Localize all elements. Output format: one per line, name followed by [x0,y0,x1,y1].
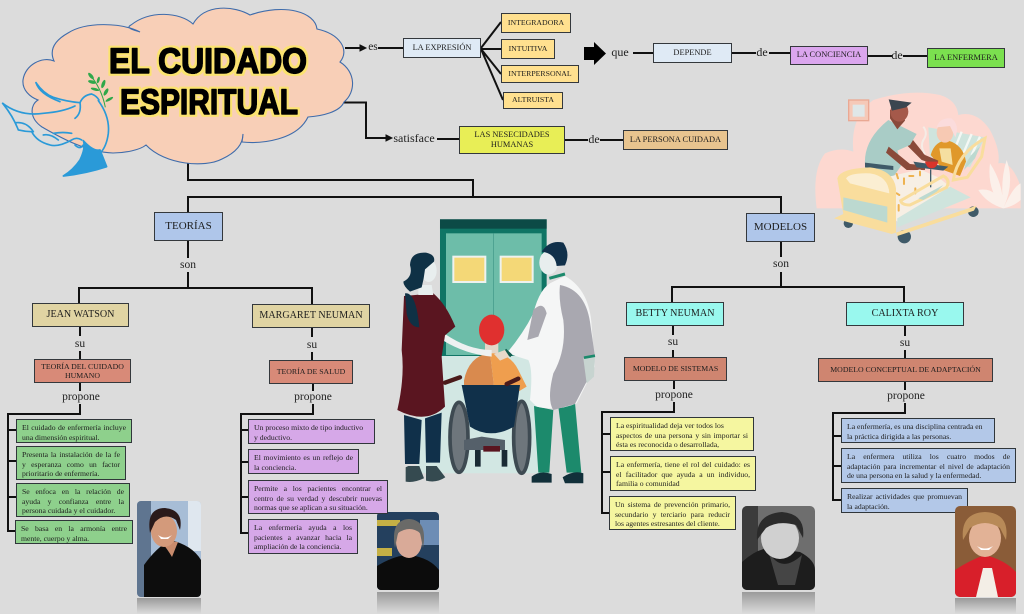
text: roy 1 [841,418,995,443]
text: betty 3: los agentes estresantes del cliente. [615,519,720,528]
text: watson 3 [16,483,130,517]
box: teorias: TEORÍAS [165,220,212,232]
word: es: es [368,41,378,53]
panel: Calixta Roy text [841,418,1016,513]
text: margaret 2 [248,449,359,474]
cloud [23,8,353,164]
word: su: su [75,338,85,350]
word: de: de [588,132,600,146]
title text: EL CUIDADO [109,42,307,81]
word: satisface: satisface [393,131,435,145]
text: betty 3: secundario y terciario para reducir [615,510,730,519]
word: de: de [891,48,903,62]
photo: Margaret Neuman [377,512,439,611]
text: margaret 2: la conciencia. [254,463,296,472]
text: roy 1: La enfermería, es una disciplina centrada en [847,422,983,431]
hospital bed frame [834,138,985,236]
text: betty 3 [609,496,736,530]
text: betty 1 [610,417,754,451]
title text: ESPIRITUAL [120,83,298,122]
connector: expresion branches [378,22,503,100]
icon: block arrow [584,42,606,65]
arrow: cloud to satisface [344,102,392,141]
box: interpersonal: INTERPERSONAL [508,69,572,78]
text: watson 1: El cuidado de enfermería incluye [22,423,126,432]
text: watson 1 [16,419,132,443]
text: margaret 4 [248,519,358,554]
text: margaret 4: pacientes a avanzar hacia la [254,533,352,542]
text: watson 2: prioritario de enfermería. [22,469,99,478]
text: margaret 1 [248,419,375,444]
text: betty 1: La espiritualidad deja ver todos los [616,421,724,430]
box: modelos: MODELOS [754,221,807,233]
box: la conciencia: LA CONCIENCIA [797,50,861,59]
mattress [853,169,971,227]
word: son: son [773,258,789,270]
text: margaret 2: El movimiento es un reflejo de [254,453,353,462]
text: margaret 4: La enfermería ayuda a los [254,523,352,532]
box: modelo de sistemas: MODELO DE SISTEMAS [633,364,718,373]
text: watson 1: una dimensión espiritual. [22,433,100,442]
bed wheels [844,202,979,243]
box: teoria del cuidado humano [34,359,131,383]
dove [3,83,109,176]
text: watson 4: mente, cuerpo y alma. [21,534,89,543]
text: roy 2 [841,448,1016,483]
patient [928,118,985,176]
box: modelos [746,213,815,242]
text: watson 2: y esperanza como un factor [22,460,120,469]
word: son: son [180,259,196,271]
box: altruista [503,92,563,109]
tray and bowl [913,127,948,187]
box: la conciencia [790,46,868,65]
box: intuitiva [501,39,555,59]
text: roy 2: adaptación para incrementar el nivel de adaptación [847,462,1010,471]
connector: teorias tree [8,241,313,533]
photo: Jean Watson [137,501,201,612]
box: integradora: INTEGRADORA [508,18,564,27]
box: la enfermera [927,48,1005,68]
word: su: su [668,336,678,348]
photo: Calixta Roy [955,506,1016,612]
text: betty 2: La enfermería, tiene el rol del cuidado: es [616,460,750,469]
panel: Jean Watson text [15,419,133,544]
text: watson 4: Se basa en la armonía entre [21,524,127,533]
word: que: que [611,45,629,59]
box: jean watson: JEAN WATSON [47,309,114,320]
text: betty 1: aspectos de una persona y sin importar si [616,431,748,440]
photo: Betty Neuman [742,506,815,611]
box: la persona cuidada [623,130,728,150]
box: las necesidades humanas: HUMANAS [491,140,533,149]
box: margaret neuman: MARGARET NEUMAN [259,310,363,321]
box: integradora [501,13,571,33]
box: las necesidades humanas: LAS NESECIDADES [474,130,550,138]
text: margaret 3 [248,480,388,514]
plant [978,160,1021,208]
word: su: su [307,339,317,351]
text: watson 3: ayuda y confianza entre la [22,497,124,506]
box: la persona cuidada: LA PERSONA CUIDADA [630,135,721,144]
text: roy 2: de una persona en la salud y la enfermedad. [847,471,981,480]
box: jean watson [32,303,129,327]
connector: depende chain [633,53,927,56]
word: propone: propone [294,391,332,403]
woman in maroon dress [397,253,492,482]
box: modelo conceptual de adaptacion: MODELO CONCEPTUAL DE ADAPTACIÓN [830,365,981,374]
text: roy 3 [841,488,968,513]
box: teoria del cuidado humano: HUMANO [65,371,100,380]
word: propone: propone [887,390,925,402]
door [417,219,547,473]
box: modelo conceptual de adaptacion [818,358,993,382]
box: calixta roy: CALIXTA ROY [872,308,938,319]
wall picture [849,100,869,121]
doctor in white coat [494,242,595,483]
word: propone: propone [655,389,693,401]
arrow: cloud to es [345,45,366,51]
text: betty 2: familia o comunidad [616,479,680,488]
text: roy 3: Realizar actividades que promuevan [847,492,962,501]
pink blob [815,93,1021,208]
connector: necesidades chain [437,139,623,140]
nurse [865,99,938,182]
word: su: su [900,337,910,349]
box: intuitiva: INTUITIVA [509,44,547,53]
box: teorias [154,212,223,241]
text: margaret 1: y deductivo. [254,433,292,442]
text: margaret 4: ampliación de la conciencia. [254,542,342,551]
panel: Margaret Neuman text [248,419,375,554]
box: calixta roy [846,302,964,326]
box: depende [653,43,732,63]
text: margaret 3: Permite a los pacientes encontrar el [254,484,382,493]
word: de: de [756,45,768,59]
text: watson 2: Presenta la instalación de la fe [22,450,120,459]
box: las necesidades humanas [459,126,565,154]
box: margaret neuman [252,304,370,328]
connector: modelos tree [602,242,905,513]
text: betty 1: ésta es reconocida o desarrollada, [616,440,719,449]
box: la enfermera: LA ENFERMERA [934,53,998,62]
text: betty 3: Un sistema de prevención primario, [615,500,730,509]
olive branch [87,72,114,107]
box: la expresion [403,38,481,58]
box: teoria de salud: TEORÍA DE SALUD [277,367,345,376]
text: roy 3: la adaptación. [847,502,890,511]
text: watson 2 [16,446,126,480]
title cloud with dove [2,8,354,177]
text: watson 3: persona cuidada y el cuidador. [22,506,115,515]
box: la expresion: LA EXPRESIÓN [413,43,471,52]
box: betty neuman [626,302,724,326]
box: altruista: ALTRUISTA [512,95,554,104]
text: margaret 3: centro de su verdad y descubrir nuevas [254,494,382,503]
text: margaret 3: normas que se aplican a su situación. [254,503,368,512]
text: watson 4 [15,520,133,544]
text: roy 1: la práctica dirigida a las personas. [847,432,951,441]
text: margaret 1: Un proceso mixto de tipo inductivo [254,423,363,432]
text: betty 2: el facilitador que ayuda a un individuo, [616,470,750,479]
box: teoria del cuidado humano: TEORÍA DEL CUIDADO [41,362,124,370]
title text [109,42,307,122]
wheelchair and patient [445,315,530,473]
box: interpersonal [501,65,579,83]
box: depende: DEPENDE [673,48,712,57]
text: betty 2 [610,456,756,491]
box: betty neuman: BETTY NEUMAN [636,308,714,319]
panel: Betty Neuman text [609,417,756,530]
box: teoria de salud [269,360,353,384]
text: roy 2: La enfermera utiliza los cuatro modos de [847,452,1010,461]
text: watson 3: Se enfoca en la relación de [22,487,124,496]
box: modelo de sistemas [624,357,727,381]
word: propone: propone [62,391,100,403]
connector: main trunk [188,163,781,213]
